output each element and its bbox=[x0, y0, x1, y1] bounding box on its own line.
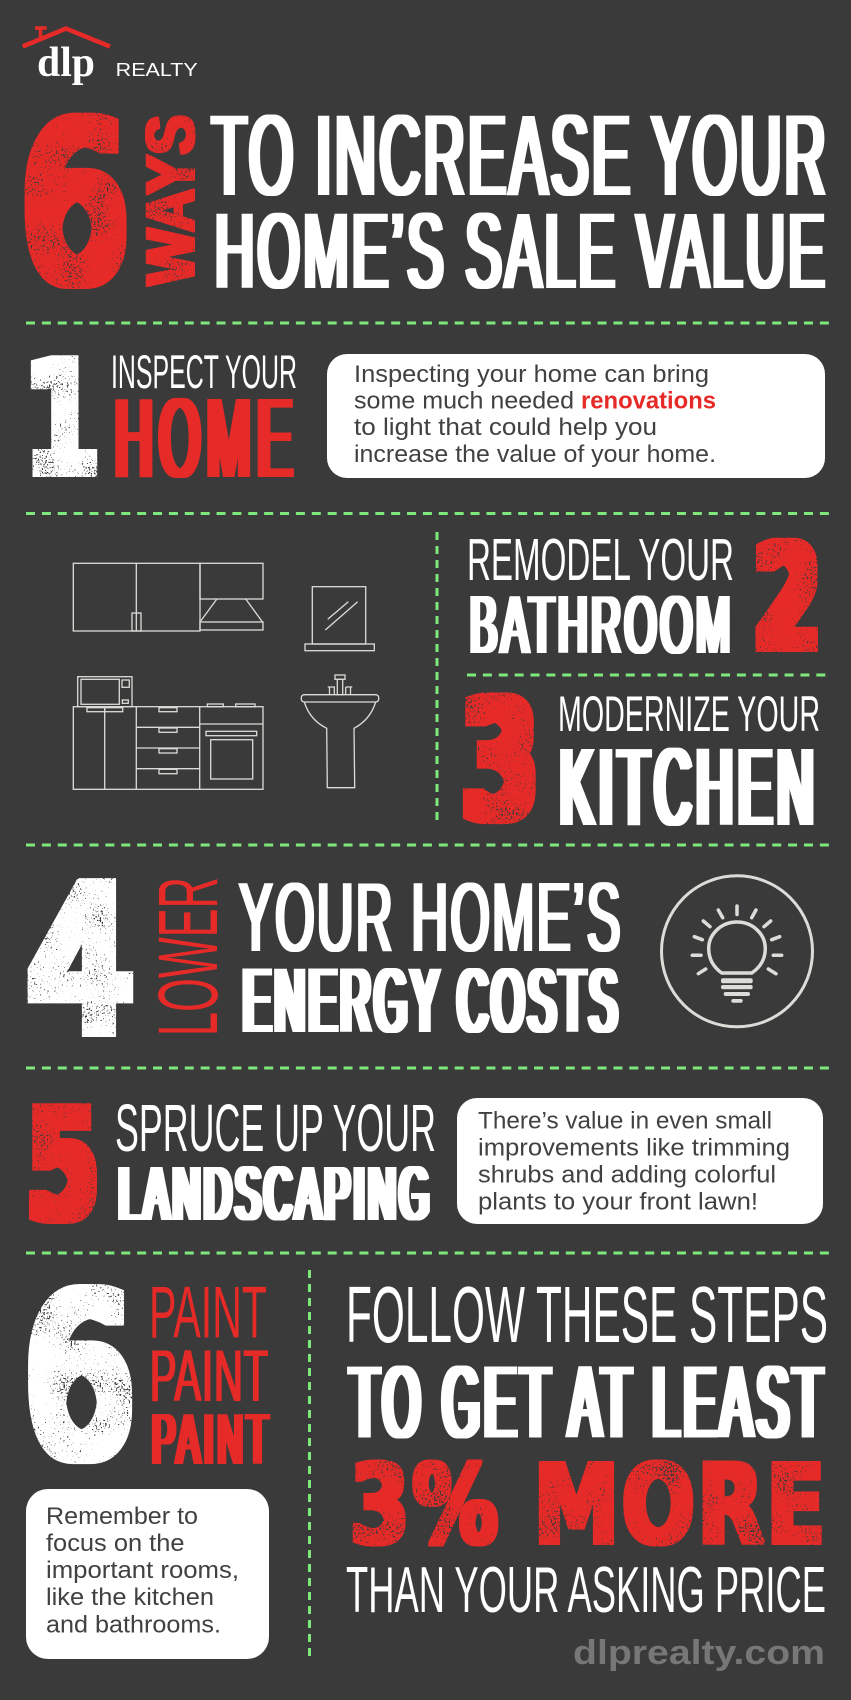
heading spruce up your: SPRUCE UP YOUR bbox=[115, 1091, 436, 1166]
icon: upper cabinets and range hood bbox=[73, 563, 263, 631]
icon: bathroom mirror bbox=[305, 587, 374, 651]
title bbox=[22, 82, 829, 329]
illustration: kitchen and bathroom line art bbox=[73, 563, 379, 789]
panel: step 1 inspect your home: HOME bbox=[115, 375, 299, 502]
callout card: Remember to bbox=[46, 1503, 198, 1530]
callout card bbox=[26, 1489, 269, 1659]
panel: step 5 spruce up your landscaping: LANDSCAPING bbox=[119, 1151, 433, 1237]
icon: pedestal sink bbox=[301, 675, 379, 788]
logo word realty: REALTY bbox=[116, 59, 198, 80]
numeral 2: 2 bbox=[757, 519, 819, 677]
infographic canvas: PAINT bbox=[152, 1400, 272, 1480]
callout card bbox=[457, 1098, 823, 1224]
callout card: shrubs and adding colorful bbox=[478, 1161, 776, 1188]
panel: step 4 lower energy costs bbox=[29, 847, 812, 1076]
callout card bbox=[327, 354, 825, 478]
logo: dlp realty bbox=[23, 28, 198, 86]
callout card: improvements like trimming bbox=[478, 1134, 790, 1162]
word paint medium: PAINT bbox=[150, 1334, 269, 1417]
numeral 3: 3 bbox=[465, 673, 534, 851]
callout card: renovations bbox=[581, 388, 716, 414]
icon: microwave bbox=[78, 677, 132, 707]
icon: light bulb in circle bbox=[662, 876, 812, 1027]
panel: step 3 modernize your kitchen bbox=[465, 673, 820, 851]
numeral 6: 6 bbox=[25, 1253, 134, 1505]
panel: step 5 spruce up your landscaping bbox=[30, 1084, 823, 1248]
numeral 4: 4 bbox=[29, 847, 133, 1076]
rotated word lower: LOWER bbox=[141, 877, 235, 1036]
callout card: and bathrooms. bbox=[46, 1612, 221, 1639]
callout card: increase the value of your home. bbox=[354, 441, 716, 468]
panel: step 2 remodel your bathroom bbox=[467, 519, 819, 677]
callout card: plants to your front lawn! bbox=[478, 1188, 758, 1215]
big red numeral 6: 6 bbox=[22, 82, 128, 329]
callout card: some much needed bbox=[354, 388, 574, 414]
icon: lower kitchen cabinets and oven bbox=[73, 704, 263, 789]
rotated word ways: WAYS bbox=[132, 115, 209, 285]
callout card: Inspecting your home can bring bbox=[354, 361, 709, 388]
callout card: to light that could help you bbox=[354, 414, 657, 441]
panel: step 1 inspect your home bbox=[26, 334, 825, 503]
heading inspect your: INSPECT YOUR bbox=[111, 346, 297, 399]
icon: red house roof bbox=[23, 28, 110, 46]
callout card: focus on the bbox=[46, 1530, 184, 1557]
callout card: important rooms, bbox=[46, 1557, 239, 1584]
numeral 1: 1 bbox=[26, 334, 100, 503]
logo wordmark dlp: dlp bbox=[37, 40, 95, 86]
callout card: like the kitchen bbox=[46, 1584, 214, 1611]
callout card: There’s value in even small bbox=[478, 1108, 772, 1135]
word paint light: PAINT bbox=[149, 1270, 267, 1354]
panel: step 6 paint paint paint bbox=[25, 1253, 272, 1659]
website url: dlprealty.com bbox=[573, 1634, 825, 1672]
panel: closing message bbox=[346, 1269, 828, 1672]
numeral 5: 5 bbox=[30, 1084, 97, 1248]
